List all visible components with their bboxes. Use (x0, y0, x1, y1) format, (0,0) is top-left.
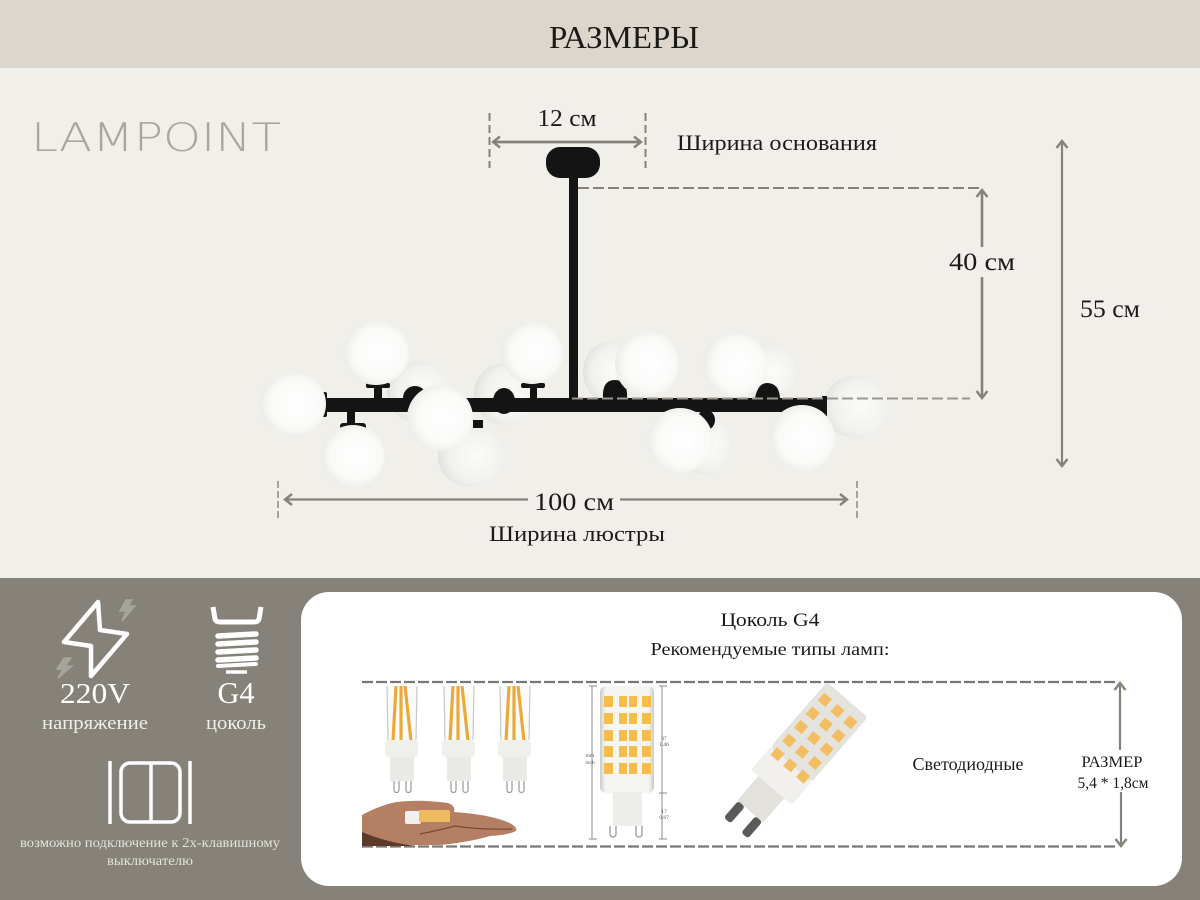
text: switch note: возможно подключение к 2х-клавишному (20, 835, 280, 850)
text: switch note: выключателю (107, 853, 193, 868)
LED bulb with dimensions (585, 686, 669, 839)
front globes (260, 321, 835, 487)
dimension: bulb size: 5,4 * 1,8см (1078, 775, 1148, 792)
text: LED label: Светодиодные (912, 754, 1024, 774)
LED bulb with dimensions: 0.67 (659, 815, 669, 821)
filament bulb 3 (498, 686, 531, 792)
filament bulb 1 (385, 686, 418, 792)
LED bulb with dimensions: 37 (661, 736, 667, 742)
dimension: bulb size (1078, 683, 1148, 846)
panel: specs (0, 578, 1200, 900)
label: chandelier width: Ширина люстры (489, 521, 665, 546)
header band (0, 0, 1200, 68)
label: base width: Ширина основания (677, 130, 877, 155)
panel: lamp types (301, 592, 1182, 886)
dimension: bulb size: РАЗМЕР (1082, 754, 1143, 771)
text: socket value: G4 (218, 675, 255, 710)
icon: socket (213, 607, 261, 672)
text: base type: Цоколь G4 (720, 610, 820, 631)
icon: lightning (57, 600, 135, 678)
LED bulb with dimensions: 1.46 (659, 742, 669, 748)
size guide lines (362, 682, 1118, 846)
LED bulb with dimensions: 17 (661, 809, 667, 815)
filament bulb 2 (442, 686, 475, 792)
icon: double switch (110, 761, 190, 824)
title: РАЗМЕРЫ (549, 19, 699, 55)
horizontal bar and holders (322, 380, 827, 430)
logo: LAMPOINT (31, 116, 281, 161)
dimension: width 100 cm: 100 см (534, 489, 614, 516)
text: recommended types: Рекомендуемые типы ламп: (650, 639, 890, 659)
text: voltage label: напряжение (42, 713, 148, 734)
LED bulb with dimensions: inch (585, 760, 595, 766)
chandelier (260, 147, 887, 487)
LED bulb with dimensions: mm (586, 753, 595, 759)
dimension: height 55 cm: 55 см (1080, 296, 1140, 323)
text: socket label: цоколь (206, 713, 266, 734)
dimension: height 40 cm: 40 см (949, 249, 1015, 276)
text: voltage value: 220V (60, 678, 130, 710)
back globes (387, 342, 887, 487)
hand holding bulb (362, 801, 516, 846)
dimension: base width 12 cm: 12 см (538, 106, 596, 132)
canopy and stem (546, 147, 600, 402)
rotated LED bulb (715, 682, 868, 846)
text: switch note (20, 835, 280, 868)
